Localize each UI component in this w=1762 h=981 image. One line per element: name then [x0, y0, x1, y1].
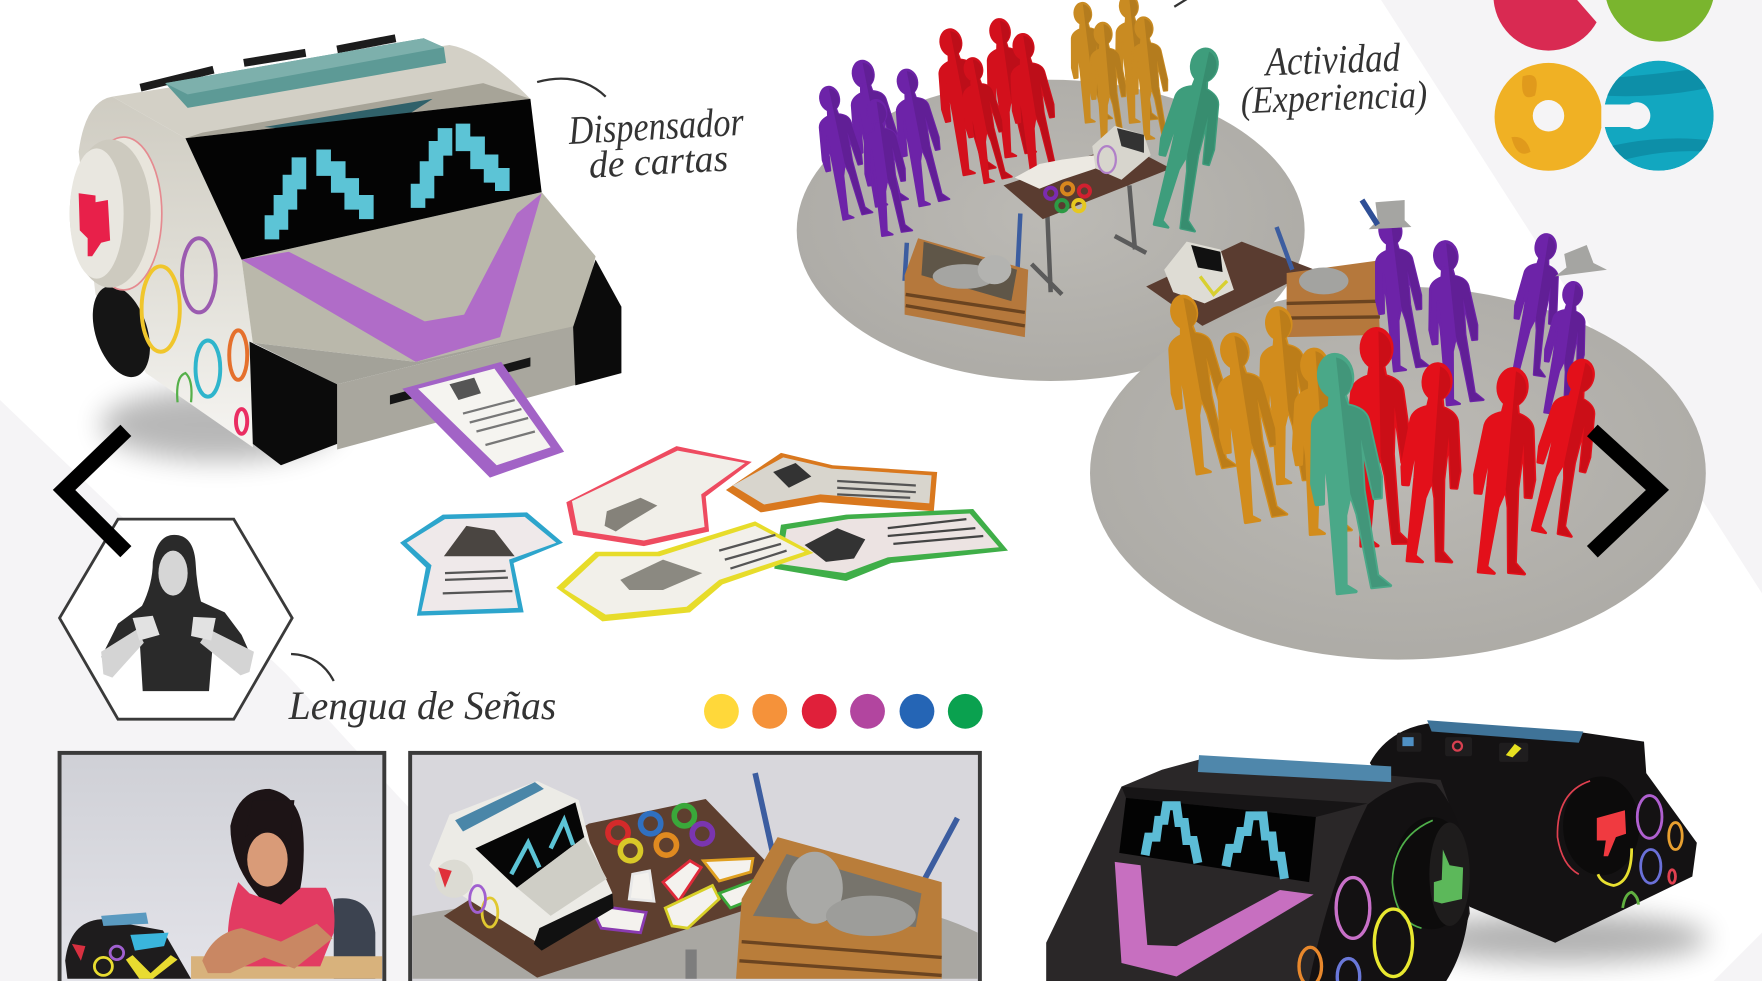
- gold figures: [1064, 0, 1173, 146]
- teal bar: [165, 38, 446, 108]
- girl face: [247, 833, 288, 887]
- card coming out: [402, 362, 564, 478]
- robot: [429, 781, 614, 951]
- knob: [1563, 776, 1640, 875]
- green card: [774, 509, 1008, 581]
- shirt and arms: [101, 601, 252, 691]
- visor top: [1121, 787, 1368, 817]
- white dispenser robot: [70, 38, 621, 478]
- right arrow: [1592, 430, 1657, 552]
- rings: [608, 806, 712, 861]
- scene 1: disc and group activity: [797, 0, 1305, 381]
- girl shirt: [228, 882, 335, 966]
- yellow card: [556, 521, 814, 621]
- crate: [1277, 227, 1380, 337]
- chair: [334, 898, 375, 979]
- hat left: [1362, 200, 1411, 229]
- small robot: [65, 912, 191, 979]
- table and robot: [1146, 242, 1315, 326]
- crate: [736, 773, 957, 979]
- floor disc: [797, 80, 1305, 381]
- front slope: [242, 192, 596, 362]
- red figures: [927, 16, 1064, 185]
- girl arms: [202, 924, 333, 973]
- girl hair: [230, 789, 304, 912]
- scene 2: disc and figures: [1090, 200, 1706, 660]
- purple figures with hats: [1366, 214, 1594, 417]
- label: actividad (experiencia): Actividad: [1262, 35, 1402, 84]
- purple V: [242, 193, 542, 362]
- rings: [1299, 878, 1413, 981]
- logo: [1493, 0, 1719, 171]
- label: dispensador de cartas: [537, 79, 745, 187]
- label: dispensador de cartas: Dispensador: [567, 99, 745, 153]
- sign language hexagon: [60, 519, 292, 719]
- table: [191, 956, 382, 979]
- black corners: [249, 342, 337, 465]
- label: lengua de señas: Lengua de Señas: [288, 683, 556, 728]
- hat right: [1555, 245, 1607, 276]
- crate: [905, 214, 1028, 337]
- floor: [412, 896, 978, 979]
- table: [1003, 126, 1171, 294]
- red figures: [1344, 328, 1610, 576]
- red card: [566, 446, 752, 546]
- small robot: [1092, 126, 1151, 180]
- label: dispensador de cartas: de cartas: [588, 138, 729, 187]
- hands: [133, 616, 216, 641]
- label: lengua de señas: [288, 654, 556, 728]
- label: actividad (experiencia): (Experiencia): [1240, 74, 1428, 122]
- hair: [142, 535, 202, 607]
- table: [444, 799, 797, 978]
- colour dots legend: [704, 694, 983, 729]
- card slot: [390, 357, 530, 405]
- black robot front: [1046, 755, 1470, 981]
- game cards: [400, 446, 1008, 621]
- blue card: [400, 512, 563, 616]
- knob with thumb down: [85, 137, 162, 290]
- front face: [337, 326, 578, 449]
- rings: [1598, 796, 1682, 908]
- black robot back: [1370, 720, 1697, 943]
- pink V: [1115, 862, 1314, 977]
- label: actividad (experiencia): [1174, 0, 1428, 122]
- side rings: [142, 238, 247, 434]
- floor disc: [1090, 287, 1706, 660]
- robot side: [79, 97, 253, 447]
- knob with thumb up: [1393, 817, 1470, 929]
- forearms: [101, 629, 254, 678]
- shadow under dispenser: [101, 389, 337, 461]
- robot top: [112, 45, 530, 138]
- left arrow: [64, 430, 126, 552]
- side panel: [1309, 782, 1470, 981]
- blue bar: [1427, 720, 1583, 743]
- photo panel: robot, table and crate: [410, 753, 980, 981]
- visor with eyes: [185, 99, 542, 260]
- shadow under black robots: [1416, 914, 1708, 963]
- purple figures: [808, 57, 951, 237]
- green figure: [1144, 43, 1234, 233]
- black lower wheel: [82, 279, 161, 384]
- orange card: [726, 453, 937, 512]
- top buttons: [140, 38, 396, 88]
- top buttons: [1397, 733, 1528, 762]
- blue bar: [1198, 755, 1391, 782]
- face: [158, 551, 188, 596]
- small cards: [590, 859, 775, 933]
- photo panel: girl with robot: [60, 753, 384, 981]
- green figure: [1299, 351, 1393, 595]
- visor with eyes: [1119, 798, 1316, 882]
- gold figures: [1156, 291, 1353, 535]
